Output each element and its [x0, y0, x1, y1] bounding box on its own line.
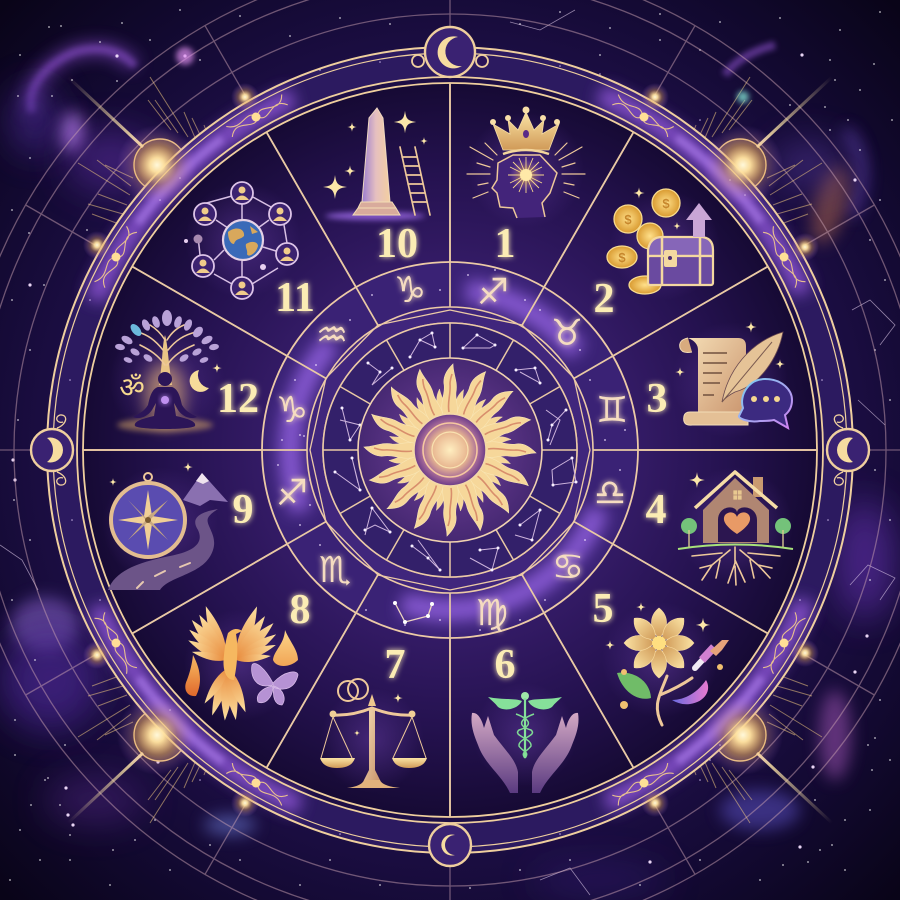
up arrow [686, 203, 712, 237]
zodiac glyphs: ♑ [276, 390, 308, 431]
road [108, 509, 218, 590]
medallion side circles [412, 55, 488, 67]
house numbers: 8 [290, 587, 310, 633]
hands [471, 713, 518, 793]
butterfly [252, 664, 298, 705]
roots [692, 547, 780, 585]
central sun [358, 358, 542, 542]
zodiac glyphs: ♍ [476, 593, 508, 634]
zodiac glyphs: ♏ [319, 550, 351, 591]
icon: house 1 crowned head [467, 106, 585, 228]
icon: house 11 global network [184, 182, 301, 299]
rings [338, 679, 368, 701]
small gold glints [83, 47, 819, 817]
zodiac glyphs: ♐ [276, 473, 308, 514]
icon: house 3 scroll, quill and speech bubble [672, 321, 792, 438]
caduceus [488, 697, 562, 709]
icon: house 9 compass and road [102, 462, 228, 590]
wheel of twelve houses [83, 83, 817, 817]
icon: house 6 caring hands with caduceus [471, 683, 579, 793]
sunburst domes and rays at the four diagonals [68, 77, 832, 823]
geometric star rings [307, 307, 593, 593]
house numbers: 5 [592, 586, 614, 632]
zodiac glyphs [276, 270, 628, 634]
sun disc [414, 414, 486, 486]
crown [493, 112, 559, 150]
pans [321, 717, 426, 758]
house numbers: 11 [275, 275, 315, 321]
chest [648, 237, 713, 256]
icon: house 2 coins and chest: $ [624, 212, 632, 227]
sun rays [364, 364, 536, 536]
quill [722, 332, 783, 402]
speech bubble [739, 379, 792, 428]
meditating figure [133, 372, 197, 429]
icon: house 4 rooted home [677, 467, 793, 585]
flames [185, 630, 298, 696]
canopy leaves [115, 310, 219, 364]
house numbers [217, 221, 668, 688]
zodiac glyphs: ♐ [477, 272, 509, 313]
house numbers: 4 [646, 487, 666, 533]
om symbol: ॐ [119, 371, 145, 404]
zodiac glyphs: ♒ [316, 315, 348, 356]
ladder [400, 147, 430, 215]
zodiac glyphs: ♋ [552, 547, 584, 588]
icon: house 2 coins and chest: $ [662, 196, 670, 211]
house numbers: 1 [494, 221, 516, 267]
icon: house 5 flower and paintbrush [602, 602, 729, 725]
icon: house 7 scales and rings [320, 679, 427, 792]
constellations lines [335, 333, 576, 570]
house numbers: 9 [232, 487, 254, 533]
right wing feathers [232, 604, 278, 665]
icon: house 2 coins and chest: $ [618, 250, 626, 265]
crescent moon [190, 370, 209, 392]
zodiac glyphs: ♉ [551, 313, 583, 354]
constellation ring [323, 323, 577, 577]
icon: house 8 phoenix and butterfly [184, 604, 298, 721]
icon: house 12 meditation tree [109, 310, 225, 438]
compass [144, 473, 152, 481]
left wing feathers [185, 604, 233, 663]
paintbrush [695, 654, 708, 668]
mountain [183, 473, 228, 506]
house numbers: 10 [376, 221, 418, 267]
zodiac glyphs: ♎ [594, 473, 626, 514]
house numbers: 2 [594, 276, 614, 322]
constellation in zodiac band [395, 603, 432, 622]
zodiac band [83, 83, 817, 817]
zodiac glyphs: ♑ [394, 270, 426, 311]
zodiac glyphs: ♊ [596, 390, 628, 431]
house numbers: 12 [217, 376, 259, 422]
burst core glows [703, 125, 783, 205]
beam [333, 708, 412, 715]
house numbers: 6 [494, 642, 516, 688]
icon: house 10 obelisk and ladder [323, 108, 430, 220]
ground and trees [678, 544, 793, 549]
house spokes [83, 83, 817, 817]
medallion curls [57, 415, 843, 485]
petals [624, 608, 694, 678]
tail feathers [202, 665, 251, 721]
sparkles [394, 111, 416, 133]
people nodes [192, 182, 298, 299]
house numbers: 3 [646, 376, 668, 422]
stem and leaves [657, 676, 692, 725]
body and head [223, 629, 242, 680]
band vines and gold dots [95, 95, 805, 805]
globe [223, 220, 263, 260]
icon: house 2 coins and chest [607, 187, 720, 300]
house numbers: 7 [384, 642, 406, 688]
column and base [364, 708, 380, 780]
